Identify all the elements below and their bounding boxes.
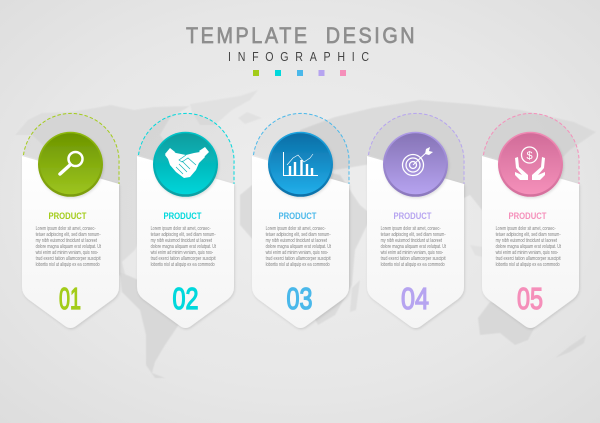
heading 01: PRODUCT: [48, 211, 87, 222]
text block 03: [266, 226, 332, 268]
number 05: 05: [517, 281, 543, 316]
text block 03: dolore magna aliquam erat volutpat. Ut: [266, 244, 332, 250]
number 04: 04: [401, 281, 429, 316]
text block 05: Lorem ipsum dolor sit amet, consec-: [496, 226, 556, 232]
card 04: [367, 156, 464, 328]
circle 03: [268, 132, 333, 197]
card 02: [137, 156, 234, 328]
title: TEMPLATE DESIGN: [186, 24, 415, 48]
icon: chart: [284, 152, 318, 176]
card 03: [252, 156, 349, 328]
text block 04: lobortis nisl ut aliquip ex ea commodo: [381, 262, 445, 268]
text block 03: trud exerci tation ullamcorper suscipit: [266, 256, 331, 262]
number 01: 01: [59, 281, 81, 316]
dashed arc 01: [24, 113, 119, 184]
text block 01: Lorem ipsum dolor sit amet, consec-: [36, 226, 96, 232]
text block 01: [36, 226, 102, 268]
icon: target: [402, 147, 433, 176]
text block 02: dolore magna aliquam erat volutpat. Ut: [151, 244, 217, 250]
card 05: [482, 156, 579, 328]
subtitle: INFOGRAPHIC: [228, 50, 369, 64]
text block 05: trud exerci tation ullamcorper suscipit: [496, 256, 561, 262]
text block 05: wisi enim ad minim veniam, quis nos-: [496, 250, 558, 256]
text block 02: wisi enim ad minim veniam, quis nos-: [151, 250, 213, 256]
text block 02: Lorem ipsum dolor sit amet, consec-: [151, 226, 211, 232]
text block 05: [496, 226, 562, 268]
text block 01: tetuer adipiscing elit, sed diam nonum-: [36, 232, 101, 238]
panel: product 05: [482, 113, 579, 328]
color squares: [253, 70, 346, 76]
icon: magnifier: [60, 152, 82, 174]
text block 03: lobortis nisl ut aliquip ex ea commodo: [266, 262, 330, 268]
text block 01: my nibh euismod tincidunt ut laoreet: [36, 238, 98, 244]
world map: [15, 90, 596, 378]
text block 02: trud exerci tation ullamcorper suscipit: [151, 256, 216, 262]
text block 05: lobortis nisl ut aliquip ex ea commodo: [496, 262, 560, 268]
heading 02: PRODUCT: [164, 211, 202, 222]
text block 01: dolore magna aliquam erat volutpat. Ut: [36, 244, 102, 250]
text block 04: my nibh euismod tincidunt ut laoreet: [381, 238, 443, 244]
dashed arc 03: [254, 113, 349, 184]
text block 02: [151, 226, 217, 268]
text block 03: Lorem ipsum dolor sit amet, consec-: [266, 226, 326, 232]
dashed arc 02: [138, 113, 234, 184]
icon: money in hands: [515, 147, 545, 180]
text block 04: tetuer adipiscing elit, sed diam nonum-: [381, 232, 446, 238]
text block 03: tetuer adipiscing elit, sed diam nonum-: [266, 232, 331, 238]
circle 02: [153, 132, 218, 197]
panel: product 03: [252, 113, 349, 328]
number 03: 03: [286, 281, 312, 316]
text block 05: my nibh euismod tincidunt ut laoreet: [496, 238, 558, 244]
text block 04: dolore magna aliquam erat volutpat. Ut: [381, 244, 447, 250]
icon: money in hands: $: [526, 150, 533, 162]
text block 04: wisi enim ad minim veniam, quis nos-: [381, 250, 443, 256]
text block 05: tetuer adipiscing elit, sed diam nonum-: [496, 232, 561, 238]
panel: product 04: [367, 113, 464, 328]
dashed arc 05: [484, 113, 579, 184]
text block 02: lobortis nisl ut aliquip ex ea commodo: [151, 262, 215, 268]
text block 04: Lorem ipsum dolor sit amet, consec-: [381, 226, 441, 232]
text block 03: wisi enim ad minim veniam, quis nos-: [266, 250, 328, 256]
text block 01: lobortis nisl ut aliquip ex ea commodo: [36, 262, 100, 268]
heading 03: PRODUCT: [278, 211, 317, 222]
text block 05: dolore magna aliquam erat volutpat. Ut: [496, 244, 562, 250]
text block 04: trud exerci tation ullamcorper suscipit: [381, 256, 446, 262]
text block 02: tetuer adipiscing elit, sed diam nonum-: [151, 232, 216, 238]
card 01: [22, 156, 119, 328]
text block 01: trud exerci tation ullamcorper suscipit: [36, 256, 101, 262]
panel: product 02: [137, 113, 234, 328]
text block 01: wisi enim ad minim veniam, quis nos-: [36, 250, 98, 256]
icon: handshake: [165, 147, 209, 178]
panel: product 01: [22, 113, 119, 328]
text block 03: my nibh euismod tincidunt ut laoreet: [266, 238, 328, 244]
circle 01: [38, 132, 103, 197]
number 02: 02: [172, 281, 198, 316]
text block 02: my nibh euismod tincidunt ut laoreet: [151, 238, 213, 244]
circle 05: [498, 132, 563, 197]
dashed arc 04: [368, 113, 464, 184]
text block 04: [381, 226, 447, 268]
heading 04: PRODUCT: [394, 211, 432, 222]
circle 04: [383, 132, 448, 197]
heading 05: PRODUCT: [508, 211, 547, 222]
